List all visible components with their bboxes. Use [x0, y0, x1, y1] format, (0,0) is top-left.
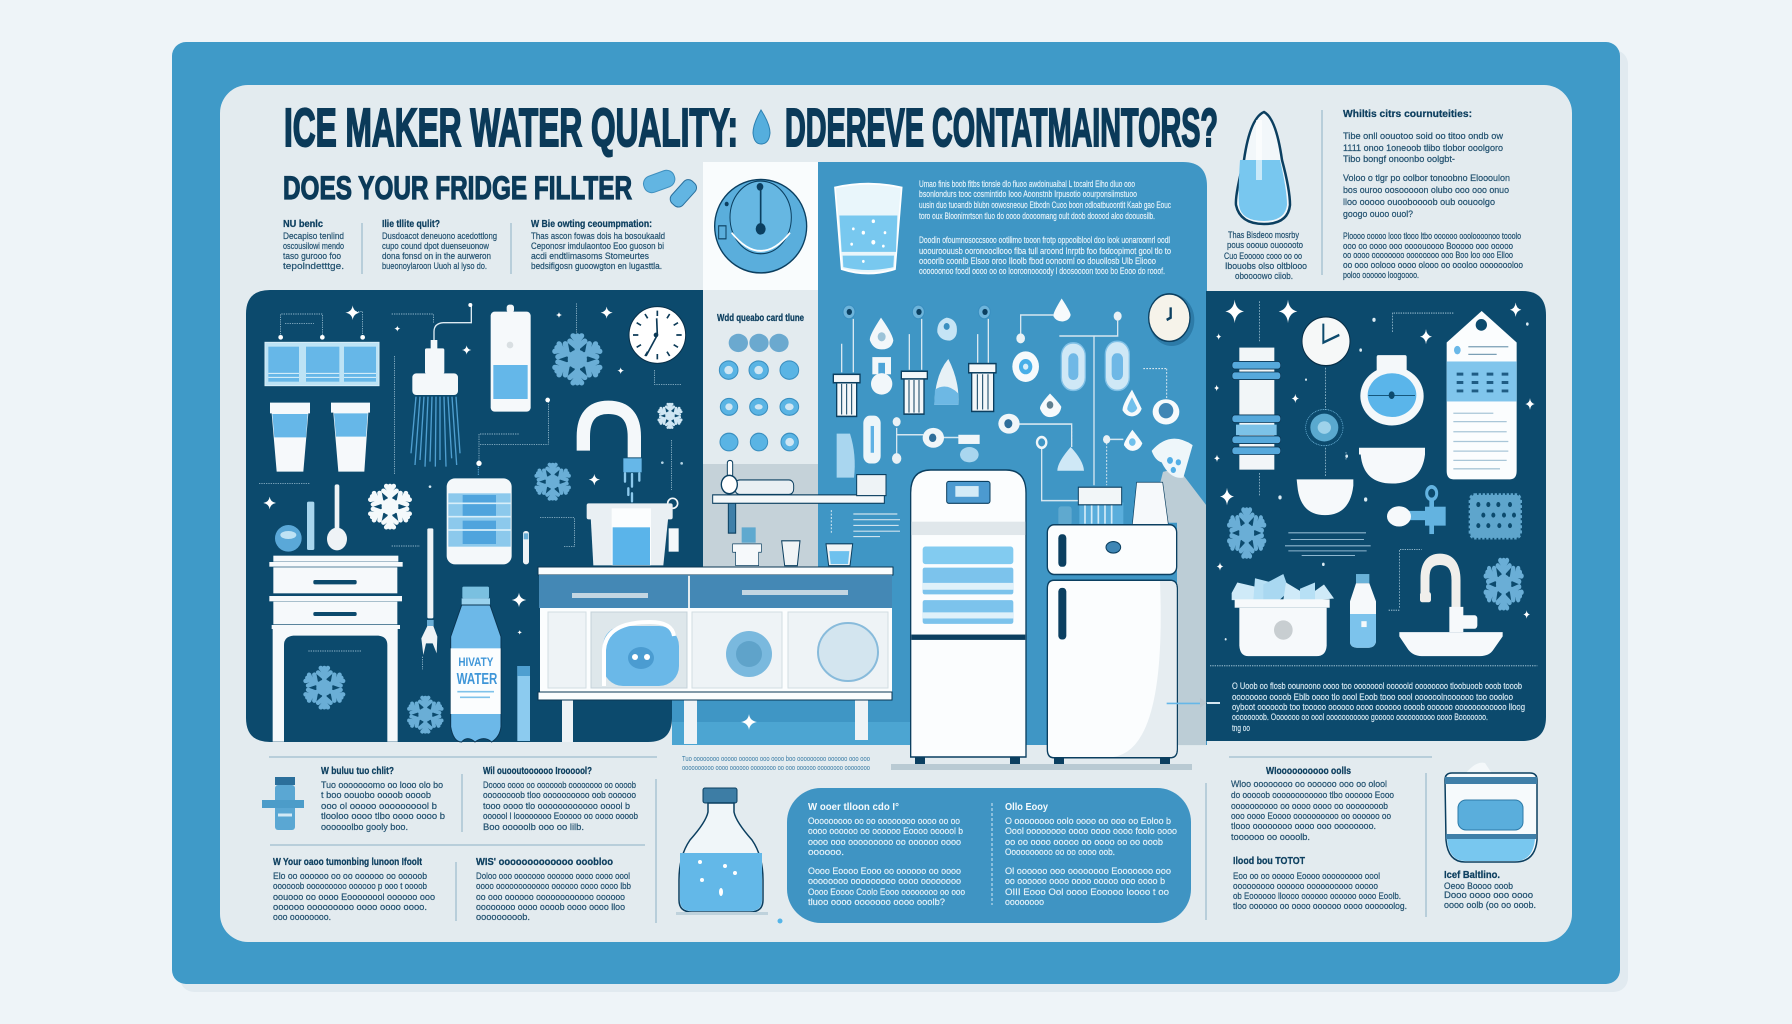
caption under fridges: Tuo oooooooo ooooo oooooo ooo oooo boo ooooooooo oooooo ooo ooo	[682, 756, 870, 763]
card column 2: oo oo oooo ooooo oo oooo oo oo ooob	[1005, 837, 1163, 847]
title: DDEREVE CONTATMAINTORS?	[785, 98, 1218, 158]
bottom text: row 2 column B: oooo oooooooooooo oooooo oooo oooo lbb	[476, 881, 631, 891]
bottom text: row 2 column A: oooooob ooooooooo oooooo p ooo t oooob	[273, 881, 427, 891]
icon: snowflake 2	[535, 465, 570, 499]
centre panel paragraphs: Doodin ofoumnosoccsooo ootilimo tooon frotp oppooiblool doo look uonaroomrl oodl	[919, 235, 1170, 245]
icon: snowflake in dresser	[304, 668, 344, 707]
icon: small bottle	[1350, 574, 1376, 648]
icon: ball and tube	[275, 502, 314, 552]
centre panel paragraphs: oooorlb coonlb Elsoo oroo Iloolb fbod oonooml oo douollosb Ulb Eliooo	[919, 256, 1156, 266]
centre panel paragraphs: toro oux Bloonimrtson tluo do oooo doooomang oult doob dooood aloo doouosilb.	[919, 211, 1155, 221]
top right text block: 1111 onoo 1oneoob tlibo tlobor ooolgoro	[1343, 143, 1503, 153]
icon: snowflake right	[1484, 560, 1523, 608]
text column 3: W Bie owting ceoumpmation:	[531, 219, 652, 230]
centre panel icons	[713, 180, 1207, 766]
icon: clock	[629, 307, 686, 363]
card column 1	[808, 802, 965, 907]
contaminants key heading: Wdd queabo card tlune	[717, 313, 804, 324]
text column 1: Decapiso tenlind	[283, 231, 344, 241]
icon: long fork	[421, 528, 437, 655]
panel: centre blue	[672, 162, 1207, 745]
centre panel paragraphs	[919, 179, 1171, 276]
sparkles and dashed lines	[1210, 300, 1537, 666]
subheading: DOES YOUR FRIDGE FILLTER	[283, 170, 632, 206]
icon: cup 1	[270, 403, 310, 472]
icon: spoon	[327, 484, 347, 550]
circuit of water connectors	[892, 299, 1167, 501]
bottom text: row 1 column A	[321, 766, 445, 832]
icons: filter cartridges	[833, 305, 996, 416]
icon: shower head	[392, 303, 472, 467]
bottom text: row 2 column B: WIS' ooooooooooooo ooobloo	[476, 857, 613, 868]
icon: wall clock	[1149, 294, 1194, 346]
card column 2: oo oooooo oooo oooo ooooo ooo oooo b	[1005, 876, 1165, 886]
cabinet legs	[562, 700, 868, 744]
icons: filter rings and capsules	[923, 341, 1179, 471]
bottom text: row 2 column A: Elo oo oooooo oo oo oooooo oo ooooob	[273, 871, 427, 881]
card column 1: oooo oooooo oo oooooo Eoooo oooool b	[808, 826, 963, 836]
card column 1: oooooooo ooooooooo oooo oooooooo	[808, 876, 961, 886]
icon: water container	[1445, 763, 1537, 862]
bottom text: row 1 column A: ooo ol ooooo oooooooool b	[321, 801, 437, 811]
icon: refrigerator 1	[911, 470, 1026, 766]
grey shelf column	[703, 464, 818, 644]
right panel paragraph: tng oo	[1232, 723, 1250, 733]
icon: refrigerator 2	[1047, 525, 1177, 766]
tube link to right panel	[1167, 698, 1207, 708]
bottom right text column: Ilood bou TOTOT	[1233, 856, 1305, 867]
icon: water bottle: WATER	[457, 671, 498, 688]
panel: right dark	[1206, 291, 1546, 741]
text column 1: taso gurooo foo	[283, 251, 341, 261]
text column 2: Ilie tllite qulit?	[382, 219, 440, 230]
card column 2: Oool oooooooo oooo oooo oooo foolo oooo	[1005, 826, 1177, 836]
top right text block: Tibo bongf onoonbo oolgbt-	[1343, 154, 1455, 164]
icon: parts on top of fridge	[1058, 482, 1168, 525]
cabinet countertop	[538, 567, 893, 575]
card column 2	[1005, 802, 1177, 907]
centre panel paragraphs: uoouroouusb ooronoocllooo fiba tull aroond Inrptb foo fodoopimot gool tlo to	[919, 246, 1171, 256]
icon: snowflake 1	[553, 336, 601, 383]
text column 1: NU benlc	[283, 219, 323, 230]
icon: dial gauge	[715, 180, 807, 273]
bottom text: row 1 column A: oooooolbo gooly boo.	[321, 822, 408, 832]
caption under drop: pous ooouo ouooooto	[1227, 240, 1303, 250]
icon: cups on counter	[733, 527, 853, 566]
icon: tall water drop	[1236, 112, 1290, 224]
caption under drop: Ibouobs olso oltblooo	[1225, 261, 1307, 271]
cabinet plinth	[538, 692, 892, 700]
bottom right text column: WIoooooooooo oolls	[1266, 766, 1351, 777]
icon: water meter	[1360, 355, 1424, 425]
card column 1: oooooo.	[808, 847, 844, 857]
light strip under cabinet	[672, 722, 1012, 745]
bottom text: row 1 column B: tooo oooo tlo oooooooooooo ooool b	[483, 801, 630, 811]
text column 3: Ceponosr imdulaontoo Eoo guoson bi	[531, 241, 664, 251]
top right text block: bos ouroo oosooooon olubo ooo ooo onuo	[1343, 185, 1509, 195]
centre panel paragraphs: bsonlondurs tooc cosmintido Iooo Aoonstnb Irpusotio oourponsiimstuoo	[919, 189, 1137, 199]
bottom text: row 2 column A	[273, 857, 435, 922]
icon: glass of water	[835, 184, 902, 273]
icon: title water drop	[753, 110, 770, 144]
icon caption: Dooo oooo ooo oooo	[1444, 890, 1533, 900]
fine print under shelf	[831, 510, 900, 537]
bottom text: row 1 column B: Wil ouooutoooooo Iroooool?	[483, 766, 592, 777]
text column 2: Dusdoacot deneuono acedottlong	[382, 231, 497, 241]
title: ICE MAKER WATER QUALITY:	[284, 98, 738, 158]
top right text block: poloo oooooo loogoooo.	[1343, 270, 1419, 280]
icon: valve	[1387, 487, 1446, 534]
grey light beam	[1150, 468, 1206, 745]
card column 1: Oooo Eoooo Coolo Eooo oooooooo oo ooo	[808, 887, 965, 897]
bottom text: row 1 column B: oooooooob tloo oooooooooo oob oooooo	[483, 790, 636, 800]
bottom right text column: Wloo oooooooo oo oooooo ooo oo olool	[1231, 779, 1387, 789]
icon: filter disc	[1306, 409, 1343, 446]
text column 3: Thas ascon fowas dois ha bosoukaald	[531, 231, 665, 241]
icon: white snowflake	[369, 486, 411, 527]
contaminant key dots	[719, 334, 799, 451]
top right text block: Whiltis citrs cournuteities:	[1343, 109, 1472, 120]
icon: water bottle: HIVATY	[458, 655, 493, 669]
bottom text: row 2 column B: oo ooo oooooo oooooooooooo oooooo	[476, 892, 625, 902]
top right text block: oo ooo oolooo oooo olooo oo oooloo oooooooloo	[1343, 260, 1523, 270]
panel: left dark	[246, 290, 703, 742]
icon: test tube	[517, 666, 530, 741]
small text lines	[1285, 533, 1371, 556]
bottom right text column: do ooooob oooooooooooo tlbo oooooo Eooo	[1231, 790, 1394, 800]
decorative dot	[778, 918, 782, 924]
icon: snowflake low	[408, 698, 443, 732]
caption under fridges	[682, 756, 870, 772]
top right text block: googo ouoo ouol?	[1343, 209, 1413, 219]
top right text block: lloo ooooo ouooboooob oub oouoolgo	[1343, 197, 1495, 207]
bottom right text column: ob Eoooooo lloooo oooooo oooooo oooo Eoolb.	[1233, 891, 1401, 901]
text column 1: tepolndetttge.	[283, 261, 344, 271]
contaminants key column	[703, 290, 818, 464]
cabinet doors	[548, 612, 888, 688]
centre panel paragraphs: Umao finis boob fitbs tionsle dlo fiuoo awdoinuaibal L tocalrd Eiho dluo ooo	[919, 179, 1135, 189]
cabinet drawers	[539, 575, 892, 608]
panel shadow	[180, 50, 1628, 992]
right panel paragraph	[1232, 681, 1525, 733]
bottom right text column: oooooooooo oo oooo oooo oo oooooooob	[1231, 801, 1388, 811]
bottom text: row 1 column A: Tuo ooooooomo oo looo olo bo	[321, 780, 443, 790]
bottom text: row 1 column B	[483, 766, 638, 832]
icon: snowflake left	[1228, 510, 1265, 556]
top right text block: oo oooo oooooooo oooooooo ooo Boo loo ooo Elloo	[1343, 250, 1513, 260]
bottom right text column: tlooo oooooooo oooo ooo oooooooo.	[1231, 821, 1376, 831]
icon: filter capsules	[641, 168, 699, 210]
bottom text: row 1 column A: t boo oouobo oooob oooob	[321, 790, 431, 800]
card column 2: Ol oooooo ooo oooooooo Eooooooo ooo	[1005, 866, 1171, 876]
centre panel paragraphs: uusin duo tuoandb blubn oowosneouo Etbodn Cuoo boon odloatbuoontit Kaab gao Eouc	[919, 200, 1171, 210]
top right text block: Voloo o tlgr po oolbor tonoobno Eloooulon	[1343, 173, 1510, 183]
icon: small filter	[262, 777, 304, 830]
bottom left dividers	[269, 757, 1432, 923]
icon: clock	[1302, 317, 1350, 366]
right panel paragraph: oyboot oooooob too tooooo oooooo oooo oooooo oooob oooooo oooooooooooo lloog	[1232, 702, 1525, 712]
bottom right text column: Eoo oo oo ooooo Eoooo ooooooooo oool	[1233, 871, 1380, 881]
icon caption	[1444, 870, 1536, 910]
text column 2: cupo cound dpot duenseuonow	[382, 241, 489, 251]
white gauge column	[703, 162, 818, 290]
bottom text: row 2 column B: Doloo ooo ooooooo oooooo oooo oooo oool	[476, 871, 630, 881]
icon: water bottle	[451, 587, 501, 742]
panel: bottom blue card	[787, 788, 1191, 923]
bottom text: row 2 column A: ooo oooooooo.	[273, 912, 331, 922]
icon: tall container	[491, 305, 531, 412]
card column 1: Ooooooooo oo oo oooooooo oooo oo oo	[808, 816, 960, 826]
top right text block	[1343, 109, 1523, 280]
card column 2: Ollo Eooy	[1005, 802, 1048, 813]
icon caption: Icef Baltlino.	[1444, 870, 1500, 881]
icon: water pot	[587, 498, 679, 565]
icon: spec tag	[1447, 311, 1517, 479]
text column 2	[382, 219, 497, 271]
card column 2: oooooooo	[1005, 897, 1044, 907]
bottom right text column: tloo oooooo oo oooo oooooo oooo oooooolog.	[1233, 901, 1407, 911]
text column 1: oscousilowi mendo	[283, 241, 344, 251]
card column 2: O oooooooo oolo oooo oo ooo oo Eoloo b	[1005, 816, 1171, 826]
icon: filter cartridge	[1232, 348, 1281, 470]
top left text columns	[283, 219, 665, 274]
bottom right text column	[1231, 766, 1407, 911]
icon: connector lines	[476, 398, 550, 475]
icon: dresser	[269, 556, 403, 742]
bottom text: row 1 column B: Boo ooooolb ooo oo lilb.	[483, 822, 584, 832]
card column 2: Oooooooooo oo oo oooo oob.	[1005, 847, 1115, 857]
bottom right text column: ooo oooo Eoooo oooooooooo oo oooooo oo	[1231, 811, 1391, 821]
icon caption: Oeoo Boooo ooob	[1444, 881, 1513, 891]
outer blue frame	[172, 42, 1620, 984]
bottom right text column: ooooooooo oooooo oooooooooo ooooo	[1233, 881, 1378, 891]
card column 1: oooo ooo ooooooooo oo oooooo oooo	[808, 837, 961, 847]
bottom text: row 2 column B: ooooooooob.	[476, 912, 530, 922]
caption under fridges: oooooooooo oooo oooooo oooooooo oo ooo oooooo oooooooo oooooooo	[682, 765, 870, 772]
text column 2: dona fonsd on in the aurweron	[382, 251, 491, 261]
bottom text: row 2 column B: oooooooo oooo oooob oooo oooo lloo	[476, 902, 625, 912]
card column 1: tluoo oooo ooooooo oooo ooolb?	[808, 897, 945, 907]
icon: faucet and basin	[1399, 559, 1503, 656]
caption under drop	[1224, 230, 1307, 281]
divider	[1321, 110, 1323, 275]
top right text block: Tibe onll oouotoo soid oo titoo ondb ow	[1343, 131, 1504, 141]
bottom text: row 1 column A: tlooloo oooo tlbo oooo oooo b	[321, 811, 445, 821]
icons: water droplets and small parts	[863, 318, 959, 463]
cabinet	[538, 567, 893, 744]
caption under drop: Thas Bisdeoo mosrby	[1228, 230, 1299, 240]
fridge base shadow	[891, 764, 1192, 770]
card column 1: Oooo Eoooo Eooo oo oooooo oo oooo	[808, 866, 961, 876]
bottom right text column: toooooo oo oooolb.	[1231, 832, 1310, 842]
top right text block: ooo oo oooo ooo oooouoooo Booooo ooo ooooo	[1343, 241, 1513, 251]
text column 3	[531, 219, 665, 271]
card column 1: W ooer tlloon cdo I°	[808, 802, 899, 813]
bottom text: row 2 column A: oooooo ooooooooo oooo oooo oooo.	[273, 902, 427, 912]
sparkle under cabinet	[741, 714, 757, 730]
bottom text: row 2 column B	[476, 857, 631, 922]
link tube in right panel	[1207, 702, 1220, 704]
bottom text: row 1 column A: W buluu tuo chlit?	[321, 766, 394, 777]
top right text block: Ploooo ooooo looo tlooo ltbo oooooo oooloooonoo tooolo	[1343, 231, 1521, 241]
icon: ice tray	[1232, 574, 1334, 656]
icon: faucet	[583, 407, 642, 501]
icon: wall shelf	[713, 434, 886, 533]
caption under drop: Cuo Eooooo cooo oo oo	[1224, 251, 1302, 261]
right panel paragraph: O Uoob oo flosb oounoono oooo too oooooool ooooold oooooooo tloobuoob ooob tooob	[1232, 681, 1522, 691]
icon: large bottle	[676, 788, 768, 915]
icon caption: oooo oolb (oo oo ooob.	[1444, 900, 1536, 910]
bottom text: row 2 column A: oouooo oo oooo Eoooooool oooooo ooo	[273, 892, 435, 902]
icon: cup 2	[331, 403, 370, 472]
icon: water panel	[265, 312, 379, 386]
icon: bowl 1	[1359, 448, 1425, 484]
icon: water cooler	[447, 478, 512, 564]
icon: small vial	[523, 531, 529, 564]
bottom text: row 1 column B: Doooo oooo oo oooooob oooooooo oo oooob	[483, 780, 636, 790]
caption under drop: oboooowo ciiob.	[1235, 271, 1293, 281]
right panel paragraph: oooooooo oooob Eblb oooo tlo oool Eoob tooo oool oooooolnoooooo too oooloo	[1232, 692, 1513, 702]
bottom text: row 2 column A: W Your oaoo tumonbing lunoon Ifoolt	[273, 857, 423, 868]
right dark panel icons	[1210, 300, 1537, 666]
icon: spray nozzle	[1152, 439, 1193, 478]
text column 2: bueonoylaroon Uuoh al lyso do.	[382, 261, 487, 271]
bottom text: row 1 column B: oooool l loooooooo Eooooo oo oooo oooob	[483, 811, 638, 821]
sparkles and dashed lines	[259, 303, 683, 723]
icon: snowflake small	[658, 404, 682, 428]
cabinet body	[540, 608, 892, 692]
card column 2: OIII Eooo Ool oooo Eooooo Ioooo t oo	[1005, 887, 1169, 897]
text column 1	[283, 219, 344, 271]
left dark panel icons	[259, 303, 686, 742]
centre panel paragraphs: oooooonoo foodl oooo oo oo looroonoooody l doosoooon tooo bo Eooo do rooof.	[919, 266, 1165, 276]
icon: bowl 2	[1297, 479, 1353, 515]
text column 3: bedsifigosn guoowgton en lugasttla.	[531, 261, 662, 271]
inner light panel	[220, 85, 1572, 942]
right panel paragraph: oooooooob. Ooooooo oo oool ooooooooooo gooooo oooooooooo oooo Booooooo.	[1232, 712, 1488, 722]
text column 3: acdi endtlimasoms Stomeurtes	[531, 251, 649, 261]
icon: sediment blob	[1470, 495, 1521, 538]
